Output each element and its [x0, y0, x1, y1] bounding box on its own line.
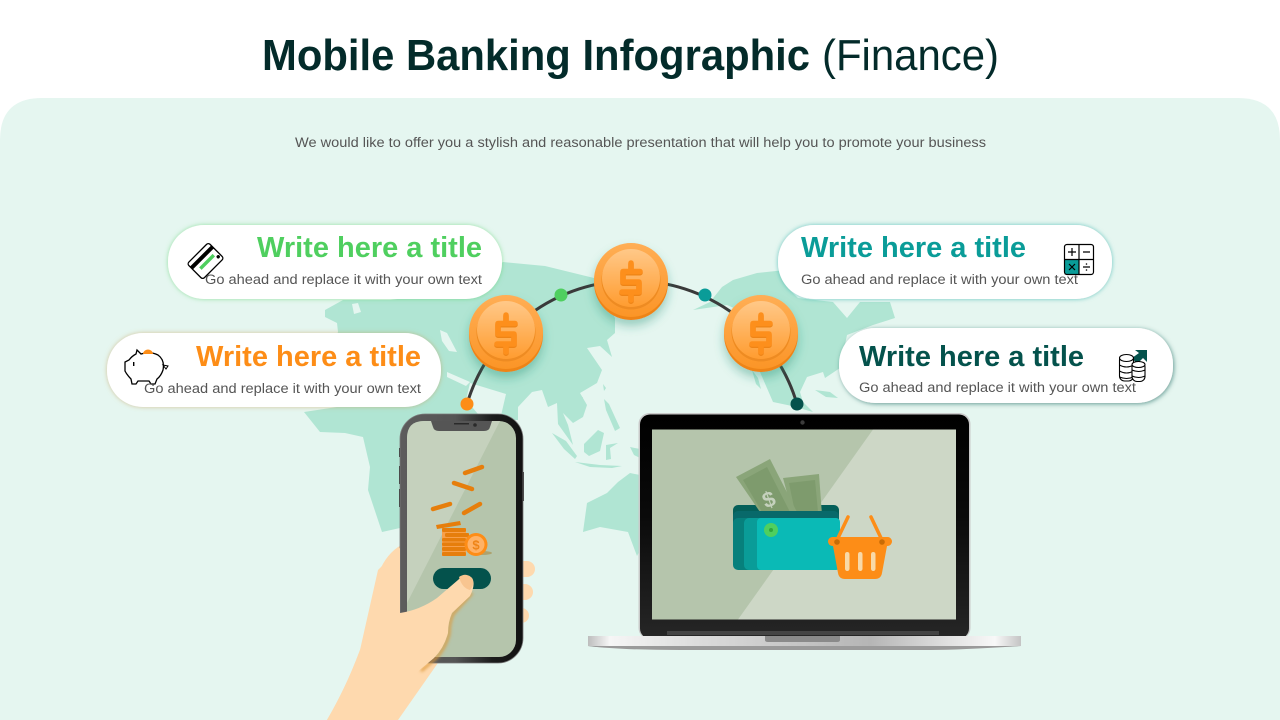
icon: coin stacks with arrow [1120, 350, 1147, 382]
coin stack [436, 521, 469, 556]
laptop [588, 413, 1021, 650]
coin: centre [594, 243, 668, 320]
title: Mobile Banking Infographic [262, 31, 810, 80]
phone notch [431, 421, 492, 431]
map: Baja and Cuba [752, 370, 838, 398]
coin: left [469, 295, 543, 372]
hand: thumb and wrist [327, 548, 474, 720]
hand: fingers behind phone [510, 561, 535, 623]
map: Eurasia and Africa [304, 262, 615, 532]
phone button [433, 568, 491, 589]
map: inland seas [352, 303, 470, 386]
falling coins [433, 467, 482, 513]
icon: calculator [1064, 244, 1094, 274]
dollar coin [464, 533, 492, 556]
callout: green card [168, 225, 502, 299]
laptop base [588, 636, 1021, 650]
callout: dark green coins: Go ahead and replace it with your own text [859, 380, 1136, 395]
laptop screen [652, 430, 956, 620]
callout: dark green coins [839, 328, 1173, 403]
map: North America [735, 280, 895, 412]
map: Russia far east [693, 270, 790, 320]
connector arc [467, 281, 797, 404]
icon: piggy bank [125, 350, 168, 384]
thumb nail [459, 575, 473, 590]
title: (Finance) [822, 31, 999, 80]
laptop hinge bar [667, 631, 939, 635]
wallet back [733, 505, 839, 535]
callout: teal calculator: Write here a title [801, 232, 1026, 264]
coin: right [724, 295, 798, 372]
laptop camera [800, 420, 805, 425]
phone buttons [399, 448, 524, 507]
world map [304, 262, 895, 556]
banknotes: $ [759, 486, 779, 513]
callout: orange piggy [107, 333, 441, 407]
phone screen highlight [407, 421, 500, 603]
wallet body [733, 511, 839, 551]
phone [399, 414, 524, 663]
callout: green card: Go ahead and replace it with your own text [205, 272, 482, 287]
connector dots [460, 288, 804, 410]
icon: credit card [187, 243, 224, 279]
callout: dark green coins: Write here a title [859, 341, 1084, 373]
callout: teal calculator [778, 225, 1112, 299]
wallet clasp [764, 523, 778, 537]
callout: teal calculator: Go ahead and replace it with your own text [801, 272, 1078, 287]
hand: palm behind phone [327, 543, 440, 720]
banknotes [736, 459, 822, 515]
map: Australia [583, 473, 640, 556]
subtitle: We would like to offer you a stylish and reasonable presentation that will help you to promote your business [295, 135, 986, 150]
callout: green card: Write here a title [257, 232, 482, 264]
icon: shopping basket [828, 517, 892, 579]
map: Southeast Asian islands [552, 384, 640, 468]
callout: orange piggy: Write here a title [196, 341, 421, 373]
callout: orange piggy: Go ahead and replace it with your own text [144, 381, 421, 396]
dollar coin: $ [472, 538, 480, 552]
